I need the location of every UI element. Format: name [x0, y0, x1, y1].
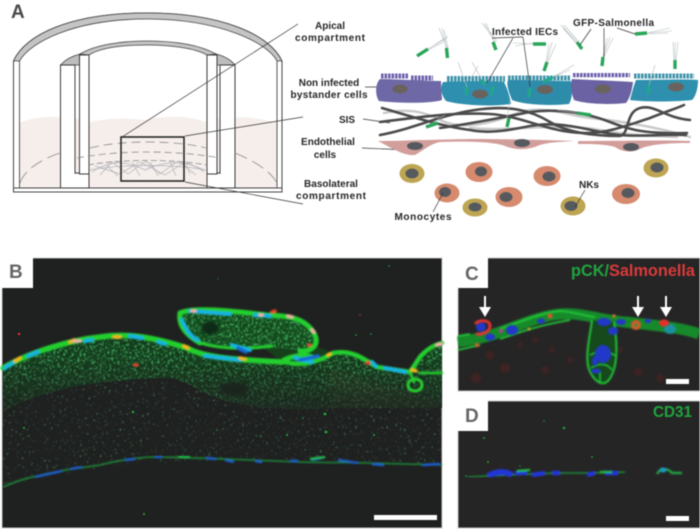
yellow and red signals [15, 311, 441, 371]
crypt [587, 320, 617, 383]
label: apical compartment: compartment [295, 33, 366, 44]
label: NKs: NKs [579, 180, 599, 191]
red background haze [471, 337, 664, 383]
outer well lid [14, 13, 282, 61]
panel B: micrograph [0, 258, 445, 528]
epithelium outline [3, 310, 442, 391]
monocytes [434, 162, 640, 207]
C stain legend: pCK/Salmonella [571, 262, 696, 280]
endothelial cells [378, 139, 690, 155]
label: non infected bystander cells: Non infected [299, 78, 359, 89]
purple bystander cell 4 [571, 79, 633, 104]
purple bystander cell 1 [376, 79, 442, 103]
teal infected cell 3 [507, 80, 572, 105]
red Salmonella signals [475, 314, 669, 347]
panel B letter tab: B [9, 262, 23, 283]
NK cells [400, 158, 668, 216]
label: endothelial cells: cells [314, 150, 337, 161]
epithelial layer [376, 75, 698, 105]
panel C letter tab: C [465, 264, 479, 285]
label: basolateral compartment: compartment [296, 191, 367, 202]
label: infected IECs: Infected IECs [492, 27, 558, 38]
culture medium [19, 117, 277, 188]
GFP-Salmonella bacteria [417, 23, 678, 127]
panel D: micrograph [458, 401, 700, 528]
lower stroma [2, 381, 442, 484]
D stain legend: CD31 [653, 404, 692, 421]
leader lines of cell labels [433, 28, 635, 212]
panel A label: A [11, 2, 25, 23]
SIS fibre network [380, 105, 690, 137]
leader lines of compartments [122, 24, 407, 204]
insert caps [60, 54, 235, 65]
scale bar B [374, 515, 437, 520]
label: monocytes: Monocytes [394, 212, 452, 223]
nuclei [392, 84, 408, 94]
label: non infected bystander cells: bystander cells [290, 90, 368, 101]
panel D letter tab [450, 395, 488, 431]
monocytes and NK cells [400, 158, 668, 216]
stray dots [18, 265, 390, 515]
panel B letter tab [0, 250, 33, 288]
panel C: micrograph [458, 258, 700, 391]
insert left wall [60, 65, 89, 188]
scale bar D [666, 516, 689, 521]
basal endothelium line [3, 457, 442, 487]
microvilli [381, 75, 694, 79]
epithelium ribbon [458, 311, 699, 384]
protruding bulb [181, 312, 314, 351]
cyan and blue nuclei [5, 311, 405, 372]
CD31 vessel line [468, 468, 682, 477]
mesh of fibres [90, 161, 206, 176]
outer well [14, 13, 282, 192]
label: endothelial cells: Endothelial [301, 137, 355, 148]
teal infected cell 5 [630, 80, 698, 102]
panel C letter tab [450, 250, 488, 288]
panel A: transwell schematic [14, 13, 282, 192]
label: GFP-Salmonella: GFP-Salmonella [573, 18, 654, 29]
tissue membrane layers [20, 142, 277, 183]
stray dots in D [465, 420, 593, 477]
label: basolateral compartment: Basolateral [304, 179, 358, 190]
blue nuclei in C [476, 318, 676, 374]
zoom box [121, 137, 184, 181]
panel D letter tab: D [465, 406, 479, 427]
label: apical compartment: Apical [315, 21, 345, 32]
label: SIS: SIS [339, 115, 355, 126]
white arrows [479, 296, 672, 317]
connection between bulb and tissue [262, 346, 333, 364]
tissue body [2, 338, 443, 411]
teal infected cell 2 [441, 81, 511, 105]
insert right wall [207, 65, 235, 188]
scale bar C [666, 379, 689, 384]
